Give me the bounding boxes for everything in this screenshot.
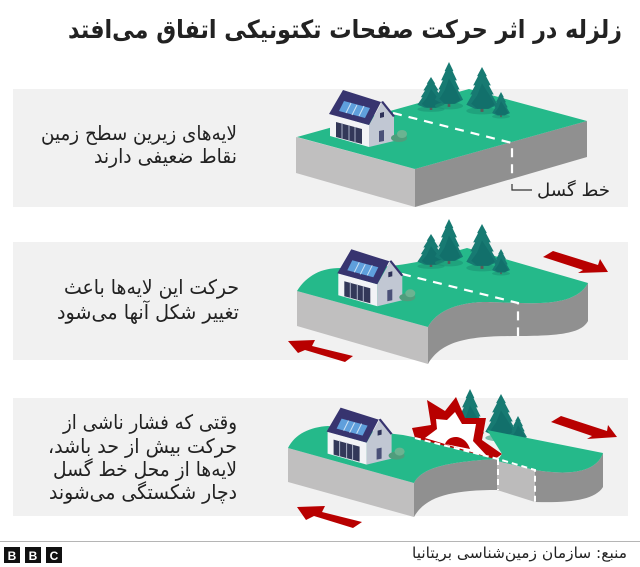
fault dashed line	[393, 113, 512, 178]
arrow: right 3	[551, 416, 617, 439]
text: step 3: لایه‌ها از محل خط گسل	[53, 457, 237, 481]
text: step 1: لایه‌های زیرین سطح زمین	[41, 121, 237, 145]
house 1	[329, 90, 407, 147]
BBC logo: B	[29, 549, 38, 563]
trees 1	[417, 62, 510, 119]
panel background 1	[13, 89, 628, 207]
source credit: منبع: سازمان زمین‌شناسی بریتانیا	[412, 544, 627, 562]
BBC logo: B	[8, 549, 17, 563]
house 3	[327, 408, 405, 465]
explosion	[412, 397, 502, 459]
BBC logo: C	[50, 549, 59, 563]
text: step 2: حرکت این لایه‌ها باعث	[64, 275, 239, 299]
text: step 3: وقتی که فشار ناشی از	[62, 410, 237, 434]
text: step 3: دچار شکستگی می‌شوند	[49, 480, 237, 504]
trees 3	[456, 389, 527, 443]
house 2	[337, 249, 415, 306]
panel: step 3 rupture	[13, 389, 628, 528]
divider	[0, 541, 640, 542]
block diagram 2	[297, 219, 588, 364]
arrow: left 3	[297, 506, 362, 528]
panel: step 2 deformation	[13, 219, 628, 364]
trees 2	[417, 219, 510, 276]
arrow: right 2	[543, 251, 608, 273]
panel background 2	[13, 242, 628, 360]
fault dashed line	[402, 274, 518, 336]
fault line label: خط گسل	[537, 179, 610, 201]
text: step 2	[57, 275, 239, 324]
panel background 3	[13, 398, 628, 516]
text: step 3: حرکت بیش از حد باشد،	[48, 434, 237, 458]
arrow: left 2	[288, 340, 353, 362]
block diagram 3	[288, 389, 603, 517]
text: step 1: نقاط ضعیفی دارند	[94, 144, 237, 168]
text: step 3	[48, 410, 237, 504]
fracture dashed lines	[415, 438, 535, 502]
BBC logo	[4, 547, 62, 563]
text: step 1	[41, 121, 237, 168]
text: step 2: تغییر شکل آنها می‌شود	[57, 299, 239, 324]
panel: step 1 weak points	[13, 62, 628, 207]
block diagram 1	[296, 62, 587, 207]
